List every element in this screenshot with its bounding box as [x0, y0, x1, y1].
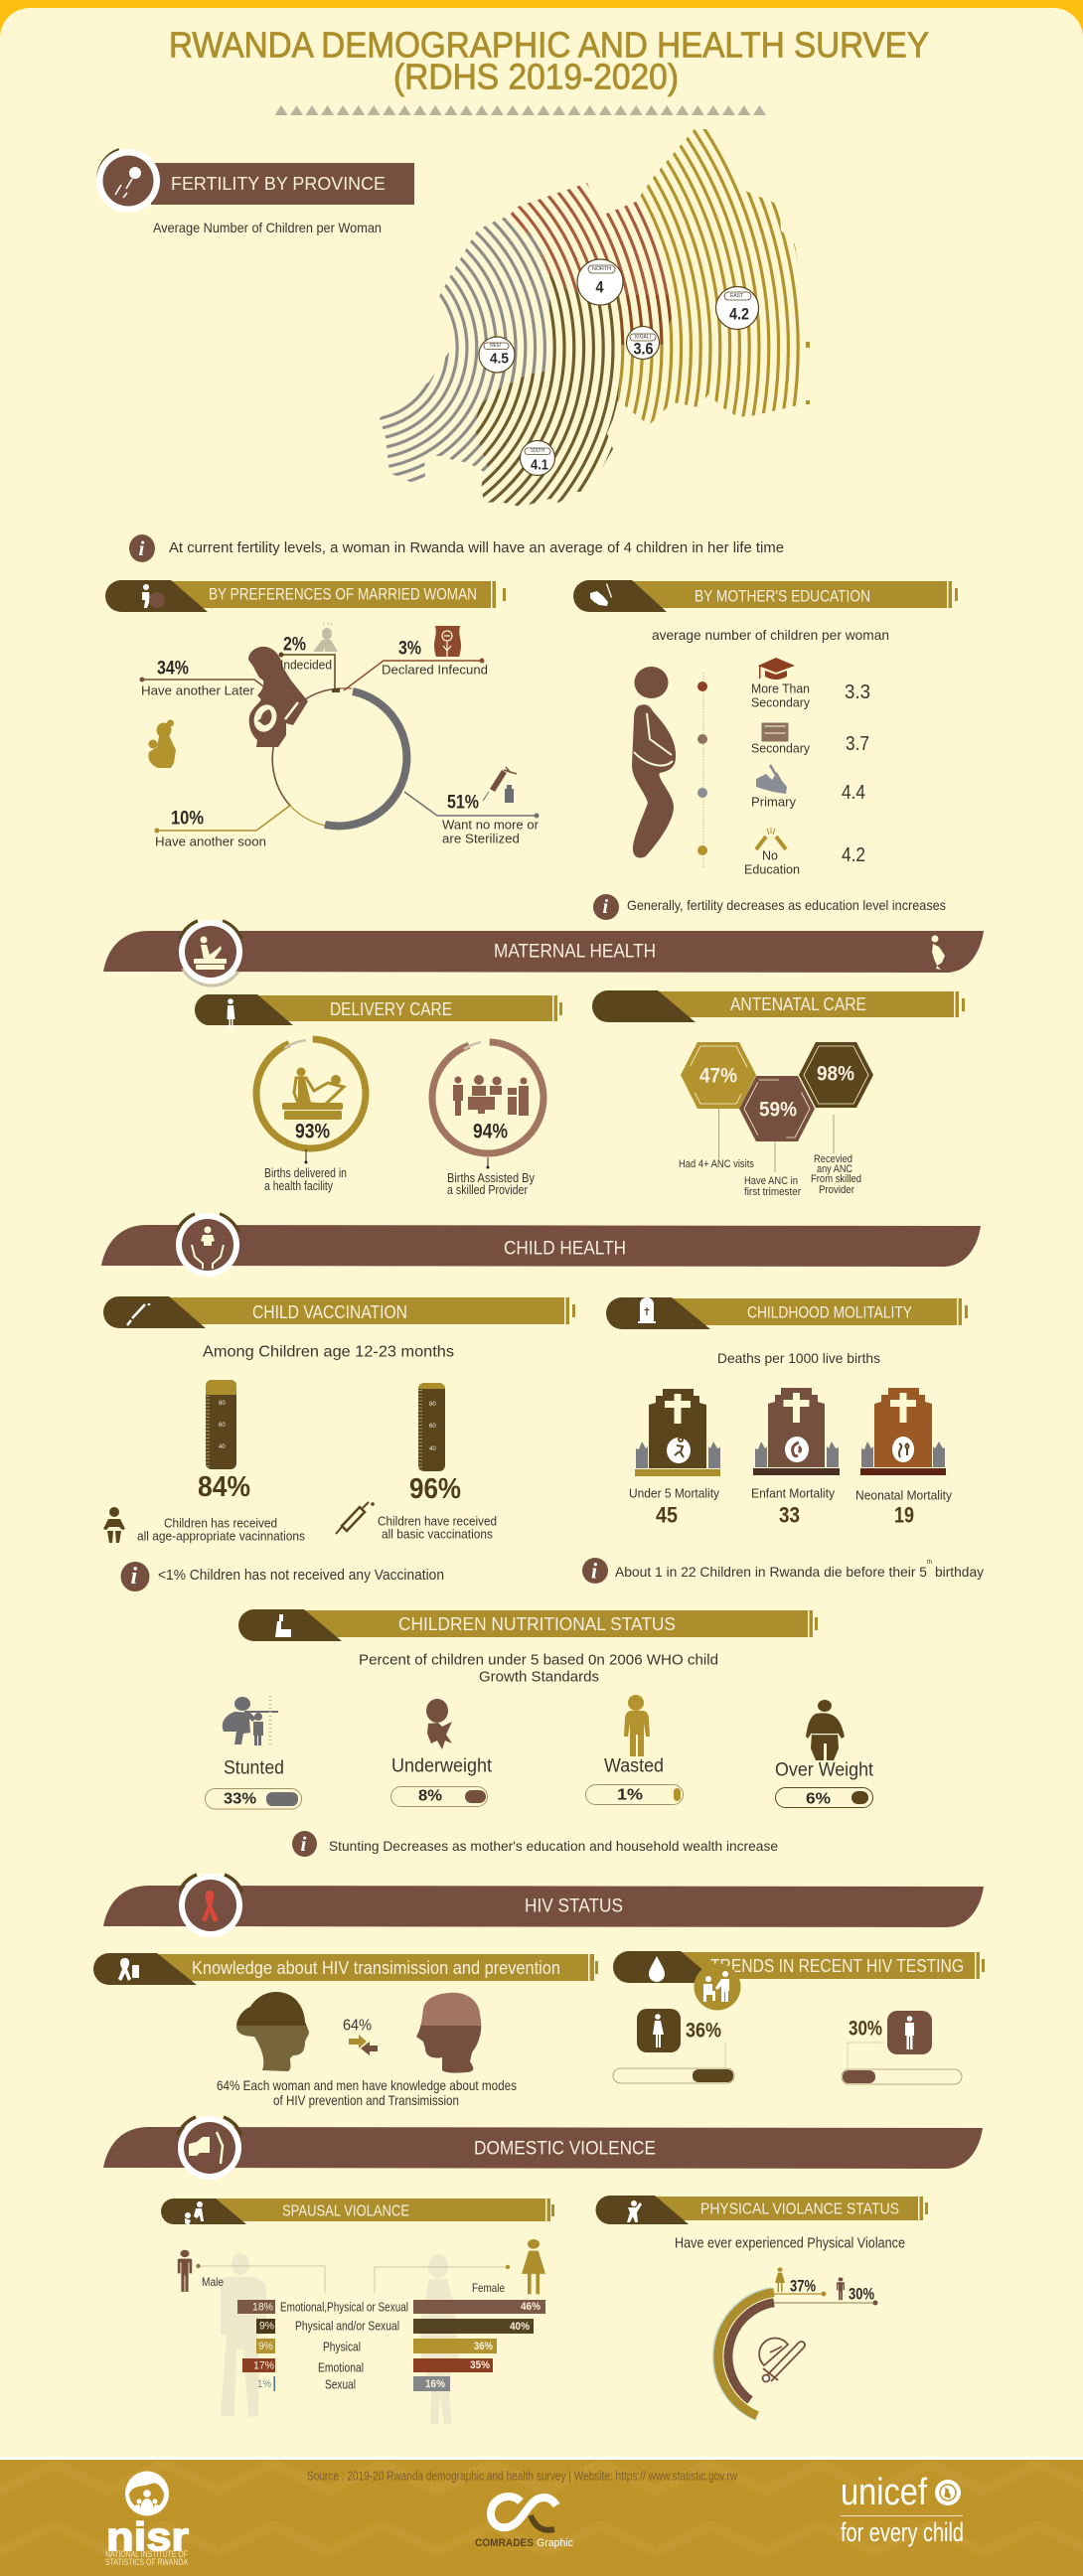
- icon: writing hand: [590, 583, 612, 606]
- badge: south: [521, 441, 554, 475]
- gravestone: neonatal: [855, 1388, 952, 1528]
- bar row: emotional: Emotional: [318, 2360, 364, 2374]
- callout: 1 in 22: i: [591, 1558, 598, 1584]
- text: age-appropriate: all age-appropriate vacinnations: [137, 1528, 305, 1544]
- bar row: physical and/or sexual: Physical and/or Sexual: [295, 2319, 399, 2333]
- callout: fertility decreases with education: i: [602, 896, 608, 918]
- label: 3%: Declared Infecund: [382, 662, 488, 678]
- logo: UNICEF: [841, 2472, 964, 2547]
- chart: tube 96%: 40: [429, 1446, 436, 1452]
- label: women 37%: [772, 2267, 827, 2297]
- thin ring: declared infecund: [341, 687, 352, 689]
- heading: antenatal care: ANTENATAL CARE: [730, 994, 866, 1014]
- chart: tube 96%: 80: [429, 1402, 436, 1408]
- panel: delivery care circles: [254, 1037, 545, 1197]
- panel: fertility by province heading: FERTILITY BY PROVINCE: [171, 174, 386, 194]
- banner: maternal health: MATERNAL HEALTH: [494, 942, 656, 962]
- stat: men 30%: [842, 2011, 962, 2084]
- badge: kigali: KIGALI: [635, 334, 651, 340]
- stat: men 30%: 30%: [849, 2017, 882, 2041]
- icon: baby: [103, 1507, 125, 1543]
- label: 10%: Have another soon: [155, 834, 266, 848]
- text: map subtitle: Average Number of Children per Woman: [153, 220, 382, 235]
- panel: fertility by province heading: [96, 149, 414, 213]
- logo: UNICEF: unicef: [841, 2472, 927, 2513]
- banner: domestic violence: DOMESTIC VIOLENCE: [474, 2138, 656, 2160]
- banner: maternal health: [103, 920, 984, 985]
- gravestone: neonatal: 19: [894, 1502, 914, 1528]
- row: more than secondary: Secondary: [751, 695, 810, 709]
- bar row: physical and/or sexual: 9%: [259, 2321, 274, 2333]
- stat: stunted: [205, 1696, 302, 1809]
- row: more than secondary: More Than: [751, 682, 810, 695]
- text: age-appropriate: Children has received: [164, 1516, 277, 1530]
- chart: births in a health facility: [254, 1037, 368, 1193]
- badge: south: SOUTH: [531, 448, 544, 454]
- title: (RDHS 2019-2020): [393, 56, 679, 97]
- label: 34%: [139, 658, 266, 697]
- heading: knowledge about HIV: Knowledge about HIV transimission and prevention: [192, 1958, 560, 1978]
- chart: fertility map of Rwanda: [380, 129, 810, 507]
- heading: trends in recent HIV testing: [613, 1951, 985, 2011]
- icon: baby bottle: [275, 1614, 291, 1637]
- label: women 37%: 37%: [790, 2277, 816, 2295]
- text: nutrition subtitle: Percent of children under 5 based 0n 2006 WHO child: [359, 1651, 718, 1669]
- panel: antenatal care hexagons: [679, 1042, 873, 1198]
- icon: wasted child: [624, 1695, 650, 1756]
- text: education subtitle: average number of children per woman: [652, 627, 889, 643]
- hexagon: 47%: Had 4+ ANC visits: [679, 1158, 754, 1170]
- gravestone: under 5: Under 5 Mortality: [629, 1486, 719, 1500]
- bar row: emotional, physical or sexual: 18%: [252, 2301, 273, 2313]
- callout: no vaccination: <1% Children has not received any Vaccination: [158, 1568, 444, 1584]
- badge: violence: [178, 2116, 241, 2180]
- icon: writing hand: [756, 764, 787, 794]
- badge: north: 4: [596, 278, 604, 296]
- chart: tube 84%: 84%: [198, 1471, 250, 1503]
- bar row: sexual: [257, 2376, 450, 2392]
- heading: delivery care: DELIVERY CARE: [330, 999, 452, 1019]
- icon: underweight child: [426, 1699, 452, 1749]
- row: secondary: Secondary: [751, 741, 810, 755]
- badge: east: EAST: [730, 293, 743, 299]
- icon: graduation cap: [758, 658, 795, 680]
- chart: tube 84%: [198, 1380, 250, 1503]
- bar row: emotional, physical or sexual: [237, 2299, 545, 2315]
- panel: HIV testing: [613, 2009, 962, 2084]
- chart: tube 96%: 96%: [409, 1473, 461, 1505]
- icon: broken pencil: [756, 828, 786, 849]
- text: source: Source : 2019-20 Rwanda demographic and health survey | Website: https:// www.statistic.gov.rw: [307, 2468, 737, 2484]
- bar row: sexual: 16%: [425, 2378, 445, 2390]
- hexagon: 98%: 98%: [817, 1063, 854, 1085]
- heading: physical violence status: [596, 2196, 928, 2224]
- callout: 1 in 22: th: [927, 1560, 932, 1566]
- bar row: physical: 36%: [474, 2341, 493, 2352]
- hexagon: 98%: any ANC: [817, 1163, 852, 1175]
- callout: stunting decreases: i: [300, 1832, 306, 1856]
- heading: by preferences of married woman: [105, 580, 506, 612]
- icon: gravestone: [638, 1297, 656, 1323]
- logo: Comrades Graphic: COMRADES: [475, 2537, 534, 2549]
- bar row: emotional: 17%: [253, 2360, 274, 2372]
- timeline: [697, 673, 707, 867]
- chart: preferences donut: [139, 622, 540, 848]
- panel: spousal violence chart: [178, 2239, 545, 2424]
- male connector: Male: [202, 2275, 224, 2289]
- icon: woman giving birth: [282, 1067, 344, 1120]
- stat: wasted: 1%: [617, 1786, 643, 1804]
- icon: medical team: [453, 1075, 529, 1116]
- callout: 1 in 22: [582, 1558, 984, 1584]
- heading: child vaccination: [103, 1296, 575, 1328]
- hexagon: 98%: [799, 1042, 873, 1196]
- label: 10%: [155, 805, 291, 848]
- footer: [0, 2457, 1083, 2576]
- hexagon: 59%: first trimester: [744, 1186, 801, 1198]
- stat: over weight: Over Weight: [775, 1760, 874, 1780]
- icon: assault figure: [627, 2200, 642, 2222]
- gravestone: neonatal: Neonatal Mortality: [855, 1488, 952, 1502]
- stat: women 36%: 36%: [686, 2019, 721, 2043]
- hexagon: 98%: Provider: [819, 1184, 854, 1196]
- badge: east: 4.2: [729, 304, 749, 324]
- hexagon: 98%: From skilled: [811, 1173, 861, 1185]
- chart: births assisted: Births Assisted By: [447, 1171, 536, 1185]
- hexagon: 59%: 59%: [759, 1099, 797, 1121]
- badge: delivery: [179, 920, 242, 985]
- row: no education: No: [762, 848, 778, 862]
- icon: mother and baby: [148, 719, 176, 768]
- bar row: emotional, physical or sexual: Emotional,Physical or Sexual: [280, 2299, 408, 2315]
- bar row: physical: [256, 2339, 497, 2354]
- text: HIV knowledge description: of HIV prevention and Transimission: [273, 2092, 459, 2108]
- illustration: ghost woman: [419, 2254, 459, 2424]
- icon: blood drop: [649, 1956, 665, 1982]
- icon: figures: [185, 2201, 204, 2225]
- bar row: sexual: Sexual: [325, 2376, 356, 2392]
- icon: measuring child: [223, 1696, 278, 1745]
- text: basic vaccinations: Children have received: [378, 1514, 497, 1528]
- icon: books: [763, 724, 787, 740]
- gravestone: infant: [751, 1388, 840, 1528]
- hexagon: 98%: Recevied: [814, 1153, 852, 1165]
- banner: child health: CHILD HEALTH: [504, 1238, 626, 1260]
- hexagon: 59%: Have ANC in: [744, 1175, 798, 1187]
- joint marker: [332, 688, 340, 692]
- badge: west: WEST: [490, 343, 502, 349]
- chart: births assisted: [430, 1040, 545, 1197]
- chart: births assisted: a skilled Provider: [447, 1183, 528, 1197]
- bar row: emotional: 35%: [470, 2359, 490, 2371]
- chart: tube 96%: 60: [429, 1424, 436, 1430]
- label: 34%: 34%: [157, 658, 189, 680]
- heading: spousal violence: SPAUSAL VIOLANCE: [282, 2203, 409, 2219]
- icon: undecided person: [313, 622, 338, 652]
- heading: childhood mortality: CHILDHOOD MOLITALITY: [747, 1303, 912, 1321]
- row: no education: [744, 828, 865, 876]
- text: HIV knowledge description: 64% Each woman and men have knowledge about modes: [217, 2077, 517, 2093]
- icon: syringe and vial: [483, 767, 517, 803]
- icon: female: [522, 2239, 545, 2294]
- chart: tube 84%: 80: [219, 1401, 226, 1407]
- panel: childhood mortality: [582, 1350, 984, 1584]
- bar row: sexual: 1%: [257, 2378, 271, 2390]
- row: more than secondary: [751, 658, 870, 709]
- heading: spousal violence: [161, 2198, 554, 2225]
- stat: stunted: 33%: [224, 1790, 256, 1808]
- text: age-appropriate: [137, 1516, 305, 1544]
- callout: stunting decreases: Stunting Decreases as mother's education and household wealth increase: [329, 1838, 778, 1854]
- stat: underweight: 8%: [418, 1788, 442, 1804]
- row: more than secondary: 3.3: [845, 682, 870, 703]
- icon: overweight child: [806, 1700, 845, 1760]
- banner: HIV status: [103, 1874, 984, 1937]
- row: no education: Education: [744, 862, 800, 876]
- region: South: [475, 275, 621, 507]
- label: men 30%: [774, 2277, 878, 2305]
- icon: reading figure: [142, 584, 165, 608]
- label: 51%: Want no more or: [442, 817, 540, 833]
- chart: births in a health facility: 93%: [295, 1121, 330, 1142]
- region: North: [511, 183, 669, 295]
- text: basic vaccinations: [378, 1514, 497, 1542]
- stat: stunted: Stunted: [224, 1758, 284, 1778]
- title: RWANDA DEMOGRAPHIC AND HEALTH SURVEY: [169, 24, 929, 66]
- panel: HIV knowledge: [217, 1992, 517, 2108]
- label: 3%: [344, 626, 488, 690]
- badge: hands and baby: [176, 1213, 239, 1277]
- icon: sperm badge: [96, 149, 160, 213]
- chart: tube 96%: [409, 1383, 461, 1505]
- bar row: physical and/or sexual: [256, 2319, 534, 2334]
- heading: knowledge about HIV: [93, 1953, 598, 1985]
- stat: over weight: 6%: [806, 1790, 831, 1808]
- heading: physical violence status: PHYSICAL VIOLANCE STATUS: [700, 2201, 899, 2217]
- heading: children nutritional status: CHILDREN NUTRITIONAL STATUS: [398, 1614, 676, 1634]
- logo: Comrades Graphic: [475, 2497, 573, 2549]
- text: nutrition subtitle: [359, 1651, 718, 1685]
- bar row: emotional: [242, 2358, 493, 2374]
- callout: stunting decreases: [292, 1831, 778, 1857]
- gravestone: infant: Enfant Mortality: [751, 1486, 835, 1500]
- callout: no vaccination: i: [131, 1564, 137, 1590]
- text: nutrition subtitle: Growth Standards: [479, 1669, 599, 1685]
- text: physical violence subtitle: Have ever experienced Physical Violance: [675, 2235, 905, 2251]
- badge: north: [577, 259, 623, 305]
- bar row: physical and/or sexual: 40%: [510, 2321, 530, 2333]
- label: 51%: 51%: [447, 793, 479, 813]
- icon: testing badge: [694, 1963, 741, 2011]
- heading: children nutritional status: [238, 1609, 818, 1641]
- heading: antenatal care: [592, 990, 965, 1022]
- logo: UNICEF: for every child: [841, 2517, 964, 2547]
- title: [169, 24, 929, 115]
- callout: 1 in 22: About 1 in 22 Children in Rwanda die before their 5: [615, 1564, 927, 1580]
- badge: east: [715, 286, 759, 330]
- stat: wasted: [586, 1695, 684, 1804]
- bar row: emotional, physical or sexual: 46%: [521, 2301, 541, 2313]
- stat: over weight: [775, 1700, 874, 1808]
- callout: fertility decreases with education: Generally, fertility decreases as education level increases: [627, 897, 946, 913]
- gravestone: under 5: [629, 1389, 720, 1528]
- panel: child vaccination: [103, 1343, 497, 1591]
- badge: west: [479, 337, 515, 373]
- female connector: Female: [472, 2281, 505, 2295]
- row: secondary: [751, 724, 869, 755]
- illustration: pregnant figure: [632, 667, 676, 858]
- logo: Comrades Graphic: Graphic: [537, 2537, 573, 2549]
- illustration: man head: [416, 1993, 481, 2073]
- callout: no vaccination: [121, 1562, 444, 1591]
- label: 34%: Have another Later: [141, 683, 255, 697]
- callout: current fertility: i: [139, 536, 145, 560]
- heading: by mother's education: [573, 580, 958, 612]
- text: basic vaccinations: all basic vaccinations: [382, 1526, 493, 1542]
- row: primary: [751, 764, 865, 809]
- badge: south: 4.1: [531, 457, 548, 473]
- illustration: ghost man: [221, 2253, 266, 2417]
- label: 3%: 3%: [398, 638, 421, 660]
- row: secondary: 3.7: [846, 733, 869, 755]
- badge: kigali: 3.6: [634, 340, 654, 358]
- region: West: [380, 218, 549, 483]
- icon: broken stick: [759, 2339, 805, 2382]
- hexagon: 47%: [679, 1042, 756, 1170]
- label: 2%: 2%: [283, 634, 306, 656]
- icon: male: [178, 2250, 192, 2292]
- chart: concentric arcs: [713, 2288, 774, 2420]
- bar row: physical: Physical: [323, 2339, 361, 2354]
- text: 64%: 64%: [343, 2017, 372, 2035]
- badge: red ribbon: [179, 1874, 242, 1937]
- hexagon: 47%: 47%: [699, 1065, 737, 1087]
- chart: births assisted: 94%: [473, 1121, 508, 1142]
- heading: trends in recent HIV testing: TRENDS IN RECENT HIV TESTING: [710, 1956, 964, 1976]
- heading: by mother's education: BY MOTHER'S EDUCATION: [695, 586, 870, 606]
- label: 2%: [278, 622, 338, 689]
- heading: by preferences of married woman: BY PREFERENCES OF MARRIED WOMAN: [209, 584, 477, 604]
- east edge marks: [806, 342, 810, 404]
- label: 2%: Indecided: [280, 658, 332, 672]
- banner: domestic violence: [103, 2116, 983, 2180]
- female connector: [375, 2265, 510, 2295]
- row: no education: 4.2: [842, 844, 865, 866]
- logo: NISR: NATIONAL INSTITUTE OF: [105, 2549, 188, 2559]
- row: primary: 4.4: [842, 782, 865, 804]
- label: men 30%: 30%: [849, 2285, 874, 2303]
- gravestone: infant: 33: [779, 1502, 800, 1528]
- stat: underweight: Underweight: [391, 1756, 493, 1776]
- icon: pregnant figure: [932, 936, 945, 970]
- chart: births in a health facility: a health facility: [264, 1179, 334, 1193]
- row: primary: Primary: [751, 795, 796, 809]
- thin ring: have another soon: [290, 806, 325, 826]
- gravestone: under 5: 45: [656, 1502, 678, 1528]
- icon: uterus: [434, 626, 461, 657]
- callout: current fertility: [129, 534, 784, 562]
- panel: mother's education: [632, 627, 889, 876]
- label: 51%: are Sterilized: [442, 831, 520, 846]
- region: East: [618, 129, 800, 424]
- text: vaccination subtitle: Among Children age 12-23 months: [203, 1343, 454, 1361]
- chart: births in a health facility: Births delivered in: [264, 1166, 347, 1180]
- arrows: [349, 2035, 378, 2055]
- bar row: physical: 9%: [258, 2341, 273, 2352]
- region: Kigali: [619, 295, 672, 345]
- label: 10%: 10%: [171, 809, 204, 829]
- thick ring: want no more: [325, 691, 406, 826]
- banner: child health: [101, 1213, 981, 1277]
- banner: HIV status: HIV STATUS: [525, 1895, 623, 1917]
- logo: NISR: STATISTICS OF RWANDA: [105, 2557, 188, 2567]
- callout: current fertility: At current fertility levels, a woman in Rwanda will have an average of 4 children in her life time: [169, 540, 784, 556]
- thin ring: have another later: [272, 688, 341, 806]
- chart: tube 84%: 60: [219, 1423, 226, 1429]
- label: 51%: [404, 767, 540, 846]
- text: mortality subtitle: Deaths per 1000 live births: [717, 1350, 880, 1366]
- panel: nutritional status: [205, 1651, 874, 1857]
- callout: 1 in 22: birthday: [935, 1564, 984, 1580]
- illustration: pregnant woman: [248, 647, 308, 747]
- stat: women 36%: [613, 2009, 734, 2083]
- chart: tube 84%: 40: [219, 1444, 226, 1450]
- stat: underweight: [391, 1699, 493, 1806]
- logo: NISR: [105, 2472, 189, 2567]
- icon: ribbon and bottle: [118, 1958, 139, 1981]
- badge: kigali: [626, 326, 660, 360]
- male connector: [196, 2264, 325, 2293]
- heading: child vaccination: CHILD VACCINATION: [252, 1302, 407, 1322]
- panel: physical violence: [675, 2235, 905, 2420]
- stat: wasted: Wasted: [604, 1756, 664, 1776]
- heading: delivery care: [195, 994, 562, 1029]
- illustration: woman head: [236, 1992, 309, 2071]
- heading: childhood mortality: [606, 1297, 968, 1329]
- badge: north: NORTH: [592, 266, 611, 272]
- icon: syringe: [127, 1303, 149, 1325]
- logo: NISR: nisr: [106, 2515, 189, 2559]
- text: HIV knowledge description: [217, 2077, 517, 2108]
- callout: fertility decreases with education: [593, 894, 946, 920]
- badge: west: 4.5: [490, 350, 509, 368]
- hexagon: 59%: [739, 1076, 815, 1198]
- icon: syringe: [336, 1502, 375, 1534]
- icon: pregnant woman: [227, 998, 234, 1029]
